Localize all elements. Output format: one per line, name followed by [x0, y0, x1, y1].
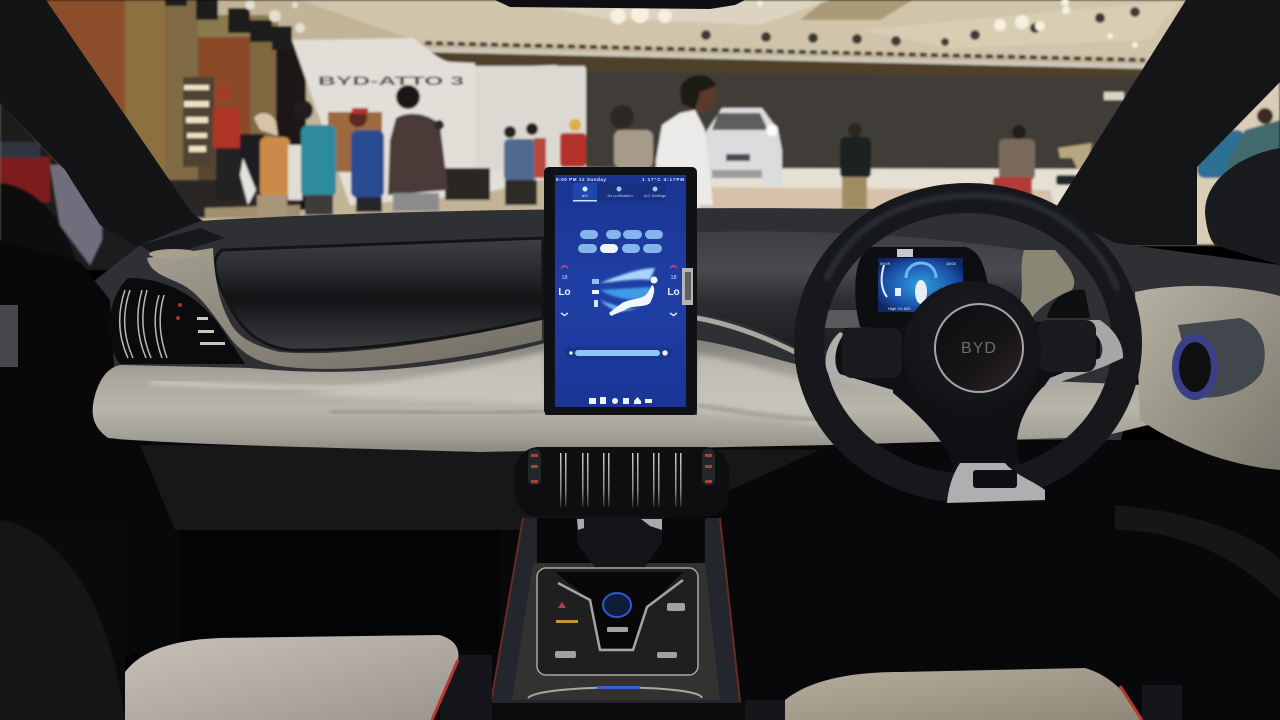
truss: [420, 43, 1145, 69]
background: exhibition hall: [0, 0, 1280, 245]
tabs: A/C: [582, 193, 588, 198]
left air vent: [110, 278, 245, 364]
airflow illustration: [592, 268, 658, 316]
wheel rim: [809, 198, 1127, 488]
AC buttons: [578, 230, 663, 253]
silver bottom plate: [947, 463, 1045, 503]
left vent silver housing: [147, 248, 542, 369]
pale trim band: [93, 340, 1148, 452]
centre touchscreen: 18: [670, 275, 677, 281]
tabs: Air purification: [607, 193, 633, 198]
gear selector: [577, 518, 662, 574]
left door dark area: [0, 240, 170, 660]
BYD logo: [935, 304, 1023, 392]
silver dash strip right: [697, 318, 795, 352]
instrument cluster: 18:00: [946, 261, 957, 266]
lit display column: [183, 77, 214, 167]
exhibition booth wall: [292, 38, 586, 205]
dock icons: [589, 397, 652, 404]
ceiling lights: [610, 0, 1138, 48]
barcode sticker: [682, 268, 693, 305]
silver spoke left: [826, 332, 893, 394]
BYD logo: BYD: [961, 340, 997, 357]
left wall: [40, 0, 140, 170]
centre touchscreen: [544, 167, 697, 415]
rim highlight: [826, 195, 1118, 290]
wall behind truss: [420, 52, 1145, 80]
fan slider: [565, 347, 673, 359]
centre console: [470, 518, 790, 720]
rear-view mirror base: [495, 0, 745, 9]
stage light rig: [165, 0, 292, 50]
round door vent: [1172, 318, 1265, 400]
right door panel: [1115, 286, 1280, 600]
right dash vent: [1018, 250, 1074, 318]
dash lower inside wheel: [823, 310, 862, 328]
front seat left: [0, 520, 492, 720]
steering wheel: [809, 195, 1127, 503]
ceiling panels: [300, 0, 1190, 60]
status bar: 9:00 PM 12 Sunday: [556, 177, 606, 182]
instrument cluster: 09:09: [880, 261, 891, 266]
side window left: [0, 100, 150, 270]
silver spoke right: [1043, 320, 1123, 388]
lower cabin dark: [95, 440, 1280, 720]
lower air vent: [515, 447, 729, 517]
white SUV: [702, 108, 782, 186]
front seat right: [745, 668, 1182, 720]
windshield pillar: right: [1053, 0, 1280, 245]
hub: [903, 281, 1041, 419]
dashboard soft pad left: [215, 238, 543, 350]
dashboard top: [70, 208, 1280, 445]
button pods: [842, 328, 902, 378]
instrument cluster: [855, 247, 988, 327]
floor: [585, 168, 1095, 212]
dash speaker grille: [149, 249, 199, 259]
centre touchscreen: 1 17°C 4:17PM: [642, 177, 684, 182]
windshield pillar: left: [0, 0, 203, 250]
sign text: BYD-ATTO 3: [318, 74, 465, 88]
dash shadow left: [140, 228, 225, 258]
control panel: [537, 568, 698, 675]
side window right: [1190, 80, 1280, 245]
centre touchscreen: 18: [561, 275, 568, 281]
dashboard soft pad right: [697, 231, 1024, 352]
people in the hall: [213, 75, 1092, 217]
tabs: A/C Settings: [644, 193, 666, 198]
spot lights: [701, 7, 1140, 46]
instrument cluster: High On 800: [888, 306, 911, 311]
instrument cluster: 446: [942, 287, 953, 293]
lower spoke black body: [825, 320, 1100, 502]
tabs: [573, 183, 666, 202]
temperature right: Lo: [667, 287, 680, 298]
head rest: [1205, 148, 1280, 265]
temperature left: Lo: [558, 287, 571, 298]
